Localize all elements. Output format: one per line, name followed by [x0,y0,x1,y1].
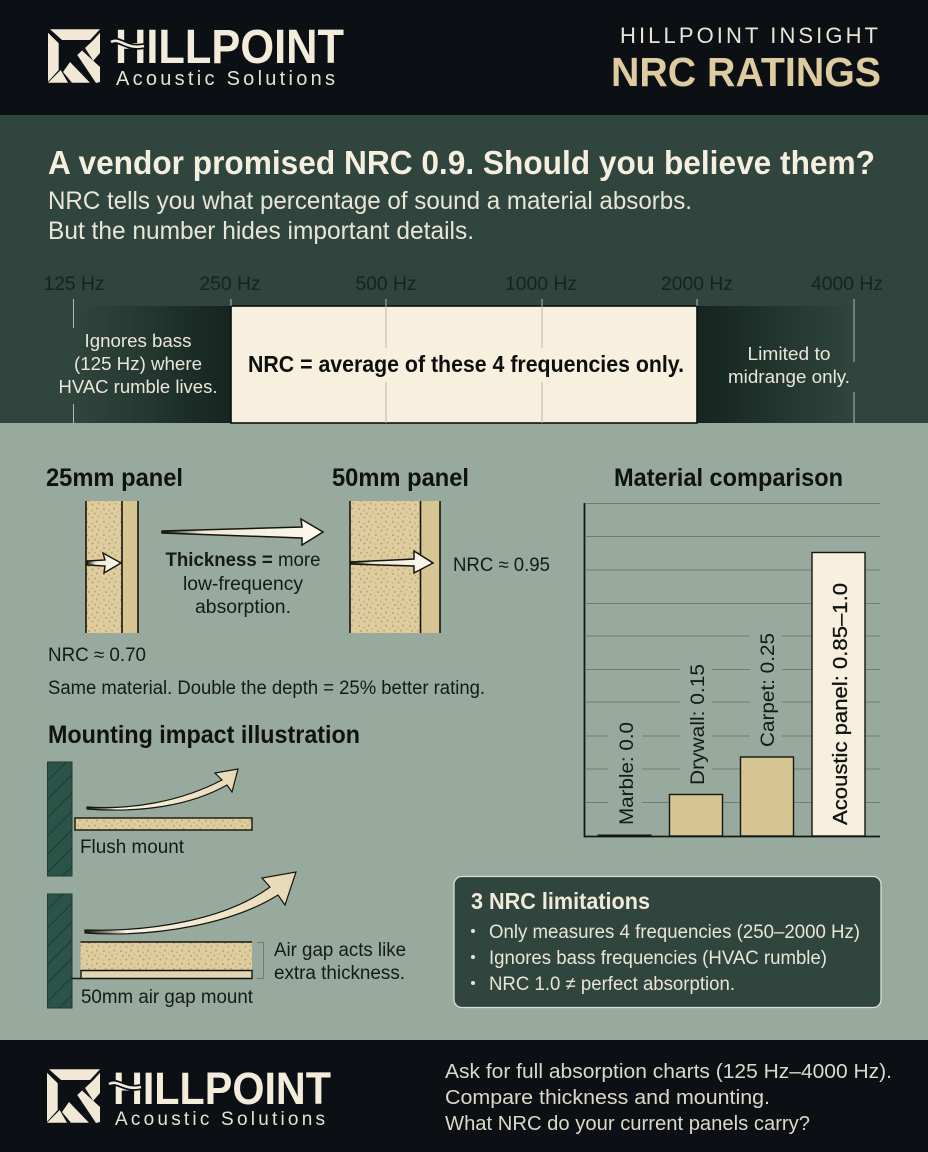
NRC measured range [231,306,697,423]
gap bracket [257,942,264,978]
panel: material comparison [584,464,880,836]
label: air gap mount: 50mm air gap mount [81,987,254,1008]
logo tagline: Acoustic Solutions [116,68,335,90]
diagram: flush mount [48,762,252,876]
left callout [58,331,218,397]
wall [48,894,72,1008]
callout list: NRC 1.0 ≠ perfect absorption. [489,974,735,995]
intro text: NRC tells you what percentage of sound a material absorbs. [48,187,692,215]
frequency scale labels: 500 Hz [356,274,416,295]
footer wordmark: HILLPOINT [113,1063,331,1114]
callout: 3 NRC limitations [454,876,881,1008]
left callout: (125 Hz) where [74,354,202,374]
frequency scale labels: 4000 Hz [811,274,883,295]
thickness note: Thickness = more [166,550,320,571]
heading: mounting: Mounting impact illustration [48,721,360,749]
bar: carpet [740,757,794,836]
note: air gap: Air gap acts like [274,940,406,961]
value: NRC 0.95: NRC ≈ 0.95 [453,555,550,576]
left ignored range [74,306,231,423]
headline: A vendor promised NRC 0.9. Should you believe them? [48,144,875,181]
diagram: 25mm panel section [86,501,138,633]
right callout [728,344,850,387]
thickness note [166,550,320,618]
heading: 50mm panel: 50mm panel [332,464,469,492]
callout list: Only measures 4 frequencies (250–2000 Hz) [489,922,860,943]
diagram: 50mm panel section [350,501,440,633]
right ignored range [697,306,854,423]
note: air gap [274,940,406,984]
note: air gap: extra thickness. [274,963,405,984]
panel: intro and frequency band [0,115,928,423]
callout list [471,922,860,995]
callout list: Ignores bass frequencies (HVAC rumble) [489,948,827,969]
footer tagline: Acoustic Solutions [115,1109,325,1130]
bar label: carpet: Carpet: 0.25 [758,633,779,747]
header band [0,0,928,115]
frequency scale labels: 2000 Hz [661,274,733,295]
arrow: thickness increase [162,519,323,545]
icon: wave through wordmark [111,41,144,47]
right callout: Limited to [748,344,830,364]
bar: drywall [670,794,722,836]
bar label: drywall: Drywall: 0.15 [688,664,709,785]
footer call to action: Ask for full absorption charts (125 Hz–4000 Hz). [445,1061,892,1083]
thickness note: absorption. [195,597,291,618]
frequency scale labels [44,274,883,295]
bar label: marble: Marble: 0.0 [617,722,638,825]
value: NRC 0.70: NRC ≈ 0.70 [48,645,146,666]
bar: acoustic panel [812,552,865,836]
footer band [0,1040,928,1152]
takeaway: Same material. Double the depth = 25% better rating. [48,678,485,699]
header eyebrow: HILLPOINT INSIGHT [620,23,878,48]
foam layer [80,942,252,970]
wordmark: HILLPOINT [115,21,344,74]
arrow: absorbed sound [85,872,296,934]
frequency scale labels: 250 Hz [200,274,260,295]
arrow: reflected sound [87,769,238,810]
left callout: Ignores bass [84,331,192,351]
flush panel [75,818,252,830]
heading: 25mm panel: 25mm panel [46,464,183,492]
bar chart [584,503,880,836]
arrow: sound into 25mm panel [87,553,121,573]
footer call to action: Compare thickness and mounting. [445,1087,770,1109]
arrow: sound into 50mm panel [351,551,433,573]
right callout: midrange only. [728,367,850,387]
band label: NRC = average of these 4 frequencies only. [248,351,684,377]
heading: chart: Material comparison [614,464,843,492]
icon: footer wave [109,1083,141,1088]
thickness note: low-frequency [183,574,304,595]
footer call to action: What NRC do your current panels carry? [445,1113,810,1135]
footer call to action [445,1061,892,1135]
panel: thickness comparison [46,464,550,699]
bar label: acoustic panel: Acoustic panel: 0.85–1.0 [830,583,852,825]
logo: Hillpoint [48,21,344,90]
frequency scale labels: 125 Hz [44,274,104,295]
header title: NRC RATINGS [611,49,881,95]
backing plate [72,970,252,978]
wall [48,762,72,876]
intro text [48,187,692,245]
icon: footer logo mark [47,1069,100,1123]
diagram: air gap mount [48,872,406,1008]
callout heading: 3 NRC limitations [471,888,650,914]
intro text: But the number hides important details. [48,217,474,245]
bar: marble [598,834,652,836]
label: flush mount: Flush mount [80,837,185,858]
icon: logo mark [48,29,100,83]
panel: mounting impact [48,721,406,1008]
footer logo [47,1063,331,1130]
left callout: HVAC rumble lives. [58,377,218,397]
frequency scale labels: 1000 Hz [505,274,577,295]
